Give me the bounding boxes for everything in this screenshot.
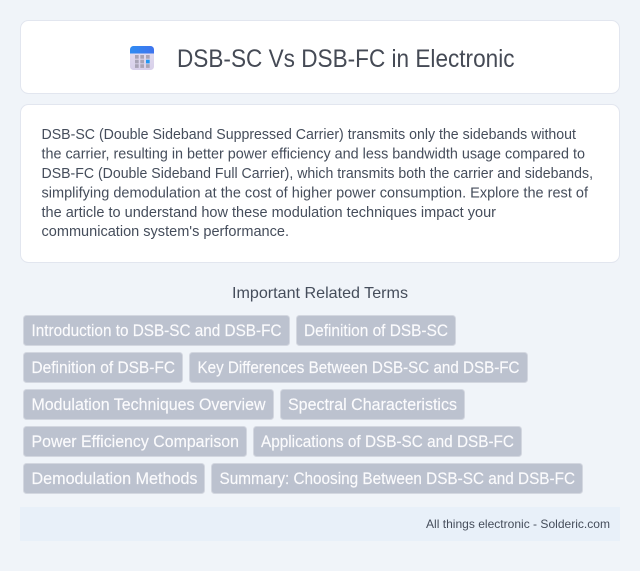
footer — [20, 507, 620, 541]
text block: description: DSB-FC (Double Sideband Full Carrier), which transmits both the carrier and sidebands, — [42, 166, 593, 182]
tag: power efficiency: Power Efficiency Comparison — [32, 433, 239, 451]
tag: definition of DSB-FC — [24, 352, 182, 382]
tag: spectral characteristics: Spectral Characteristics — [288, 396, 457, 414]
title: DSB-SC Vs DSB-FC in Electronic — [177, 46, 514, 73]
footer credit: All things electronic - Solderic.com — [426, 517, 610, 531]
tag: applications — [254, 426, 522, 456]
tag: demodulation methods — [24, 464, 204, 494]
tag: modulation techniques — [24, 390, 274, 420]
tag: definition of DSB-FC: Definition of DSB-FC — [32, 359, 175, 377]
tag list — [24, 316, 582, 494]
text block: description: communication system's performance. — [42, 224, 289, 240]
panel: description — [20, 104, 620, 262]
tag: definition of DSB-SC: Definition of DSB-SC — [304, 322, 448, 340]
tag: demodulation methods: Demodulation Methods — [32, 470, 198, 488]
tag: introduction: Introduction to DSB-SC and DSB-FC — [32, 322, 282, 340]
tag: spectral characteristics — [280, 390, 464, 420]
tag: power efficiency — [24, 426, 246, 456]
tag: key differences — [190, 352, 528, 382]
tag: definition of DSB-SC — [296, 316, 456, 346]
text block: description — [42, 127, 593, 240]
text block: description: simplifying demodulation at the cost of higher power consumption. Explore the rest of — [42, 186, 588, 202]
tag: key differences: Key Differences Between DSB-SC and DSB-FC — [198, 359, 520, 377]
tag: summary: Summary: Choosing Between DSB-SC and DSB-FC — [220, 470, 575, 488]
text block: description: the article to understand how these modulation techniques impact your — [42, 205, 496, 221]
tag: introduction — [24, 316, 290, 346]
tag: summary — [212, 464, 582, 494]
tag: modulation techniques: Modulation Techniques Overview — [32, 396, 266, 414]
text block: description: DSB-SC (Double Sideband Suppressed Carrier) transmits only the sidebands without — [42, 127, 576, 143]
tag: applications: Applications of DSB-SC and DSB-FC — [261, 433, 514, 451]
text block: description: the carrier, resulting in better power efficiency and less bandwidth usage compared to — [42, 146, 585, 162]
header panel — [20, 20, 620, 94]
heading: related terms: Important Related Terms — [232, 285, 408, 302]
icon: calendar — [130, 46, 154, 70]
